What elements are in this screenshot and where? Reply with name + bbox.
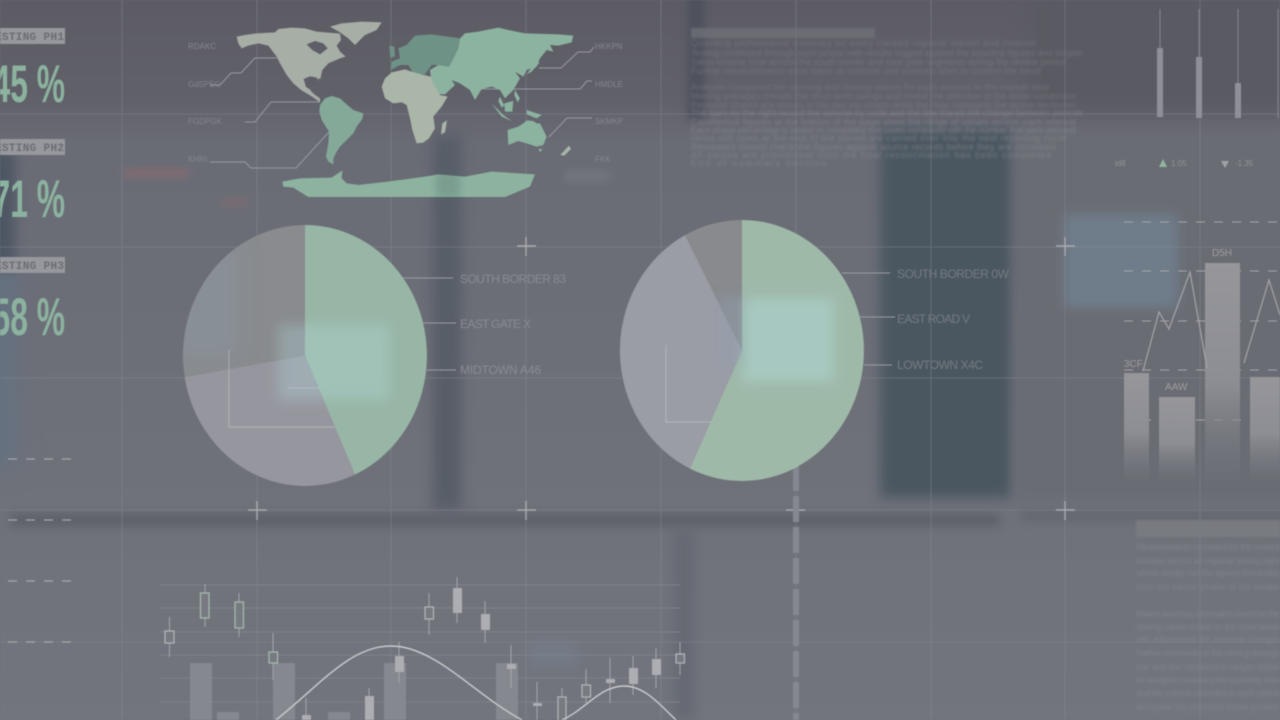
map labels: FKK: [595, 155, 611, 164]
filled candles: [302, 588, 661, 720]
pie labels: EAST GATE X: [460, 317, 531, 331]
bar labels: [1124, 248, 1232, 393]
stat: testing phase 1: [0, 28, 65, 114]
text block: bottom right notes: session across all regional testing sites: [1136, 556, 1280, 566]
map labels: HMDLE: [595, 80, 623, 89]
text block: top centre report: Further measurements were taken at midtown and lowtown sites to confirm the trend: [691, 66, 1041, 76]
icon: up triangle: [1159, 159, 1167, 167]
pie slice: green: [305, 225, 427, 474]
leader lines: [403, 278, 456, 370]
pie labels: MIDTOWN A46: [460, 363, 541, 377]
europe and west russia: [391, 34, 460, 74]
madagascar: [441, 120, 447, 134]
stat: testing phase 3: [0, 257, 65, 347]
text block: bottom right notes: line and the candlestick ranges follow: [1136, 662, 1280, 672]
bar labels: 3CF: [1124, 359, 1143, 370]
delta indicators: -1.35: [1235, 159, 1254, 168]
text block: top centre report: Testing continued through each phase with results logged against the baseline figures and targets: [691, 48, 1084, 58]
north america: [237, 28, 346, 102]
text block: top centre report: All values are provisional until the final reconciliation has been completed: [691, 150, 1051, 160]
map labels: SKMKP: [595, 117, 623, 126]
text block: bottom right notes: [1135, 520, 1280, 712]
world map: [188, 22, 623, 198]
pie labels: [460, 272, 566, 377]
text block: top centre report: Reviewers should check the figures against source records before they are circulated: [691, 142, 1056, 152]
map labels: [188, 42, 623, 164]
text block: bottom right notes: Measurements recorded for the current: [1136, 542, 1280, 552]
delta indicators: id8: [1115, 159, 1126, 168]
text block: bottom right notes: from the earlier phase of the review: [1136, 582, 1280, 592]
text block: bottom right notes: Market summary information based on the: [1136, 609, 1280, 619]
hollow candles: [165, 593, 684, 720]
text block: top centre report: Quarterly performance summary for every tracked regional market and channel: [691, 38, 1036, 48]
inner bracket: [666, 345, 711, 422]
map labels: FGDPGK: [188, 117, 222, 126]
delta indicators: 1.05: [1171, 159, 1187, 168]
text block: top centre report: Items still open at the end of the period are carried over into the next reporting cycle: [691, 133, 1066, 143]
text block: top centre report: Regional shares are shown in the two pie charts while the map highlights the active territories: [691, 100, 1076, 110]
text block: top centre report: Moving averages smooth the short term swings and reveal the direction of the wider movement: [691, 91, 1076, 101]
antarctica: [282, 170, 535, 197]
moving average curves: [276, 646, 676, 720]
chart grid: [160, 585, 680, 702]
pie labels: EAST ROAD V: [897, 312, 970, 326]
text block: bottom right notes: and the volume recorded in each period: [1136, 688, 1280, 698]
leader lines: [842, 273, 895, 365]
bar and line chart: right: [1124, 222, 1280, 480]
pie labels: [897, 267, 1010, 372]
volume bars: [190, 663, 518, 720]
window glow through pie: [718, 295, 834, 382]
southeast asia islands: [492, 90, 542, 121]
text block: top centre report: [691, 28, 1084, 168]
australia: [508, 120, 547, 152]
text block: top centre report: End of summary section: [691, 158, 826, 168]
text block: top centre report: Each phase percentage is based on completed test cases compared with the number that were planned: [691, 125, 1076, 135]
map labels: KHRI: [188, 155, 207, 164]
delta indicators: [1115, 159, 1254, 168]
new zealand: [560, 146, 571, 156]
text block: bottom right notes: alongside the predicted future position: [1136, 702, 1280, 712]
hudson bay: [307, 41, 328, 54]
text block: top centre report: Candlestick figures at the bottom of the page show the range of values across each interval: [691, 117, 1076, 127]
pie labels: SOUTH BORDER 0W: [897, 267, 1010, 281]
text block: top centre report: Sales volume rose across the south border and east gate segments during the review period: [691, 57, 1066, 67]
asia: [430, 28, 573, 100]
map labels: GdSPEG: [188, 80, 221, 89]
pie labels: SOUTH BORDER 83: [460, 272, 566, 286]
bar labels: AAW: [1165, 382, 1188, 393]
greenland: [330, 22, 382, 45]
text block: top centre report: The bars on the right record the volume by code and the line traces the change between periods: [691, 108, 1084, 118]
map connector lines: [210, 47, 594, 168]
text block: bottom right notes: closing values shown on the chart below: [1136, 622, 1280, 632]
bars: [1124, 263, 1280, 480]
dashed vertical axis: [793, 465, 799, 720]
pie chart: left: [170, 225, 566, 486]
report heading bar: [691, 28, 875, 38]
pie slice: grey lower: [185, 356, 355, 486]
candle wicks: [170, 577, 680, 720]
panel: testing phase statistics: [0, 28, 65, 347]
bar labels: D5H: [1212, 248, 1232, 259]
pie slice: green: [690, 220, 864, 481]
left dashed gauge lines: [8, 459, 72, 642]
gulf of mexico: [304, 76, 317, 90]
britain: [389, 46, 395, 58]
text block: top centre report: Analysts compared the opening and closing values for each session in the market data: [691, 82, 1049, 92]
text block: bottom right notes: where results met the agreed thresholds: [1135, 568, 1280, 578]
window glow through pie: [186, 260, 390, 402]
background band across antarctica: [436, 172, 460, 198]
trend line: [1143, 272, 1280, 371]
notes heading bar: [1136, 520, 1280, 537]
stat: testing phase 2: [0, 139, 65, 229]
dashed grid lines: [1124, 222, 1280, 420]
text block: bottom right notes: Further comments on the moving average: [1136, 648, 1280, 658]
inner bracket: [229, 350, 335, 427]
japan: [527, 55, 539, 74]
text block: bottom right notes: for analysts reviewing the quarterly data: [1136, 675, 1280, 685]
icon: down triangle: [1221, 161, 1229, 168]
south america: [319, 96, 363, 164]
crosshair markers: [248, 237, 1075, 520]
candlestick chart: bottom: [160, 577, 684, 720]
pie slice: lavender grey: [620, 235, 742, 469]
pie chart: right: [620, 220, 1010, 481]
continents: [237, 22, 573, 197]
text block: bottom right notes: with adjustments for seasonal changes: [1135, 634, 1280, 644]
pie slice: olive upper left: [183, 225, 305, 377]
map labels: RDAKC: [188, 42, 216, 51]
pie slice: dark upper: [685, 220, 742, 350]
africa: [382, 69, 448, 143]
map labels: HKKPN: [595, 42, 623, 51]
pie labels: LOWTOWN X4C: [897, 358, 983, 372]
candlesticks: top right: [1157, 9, 1278, 118]
